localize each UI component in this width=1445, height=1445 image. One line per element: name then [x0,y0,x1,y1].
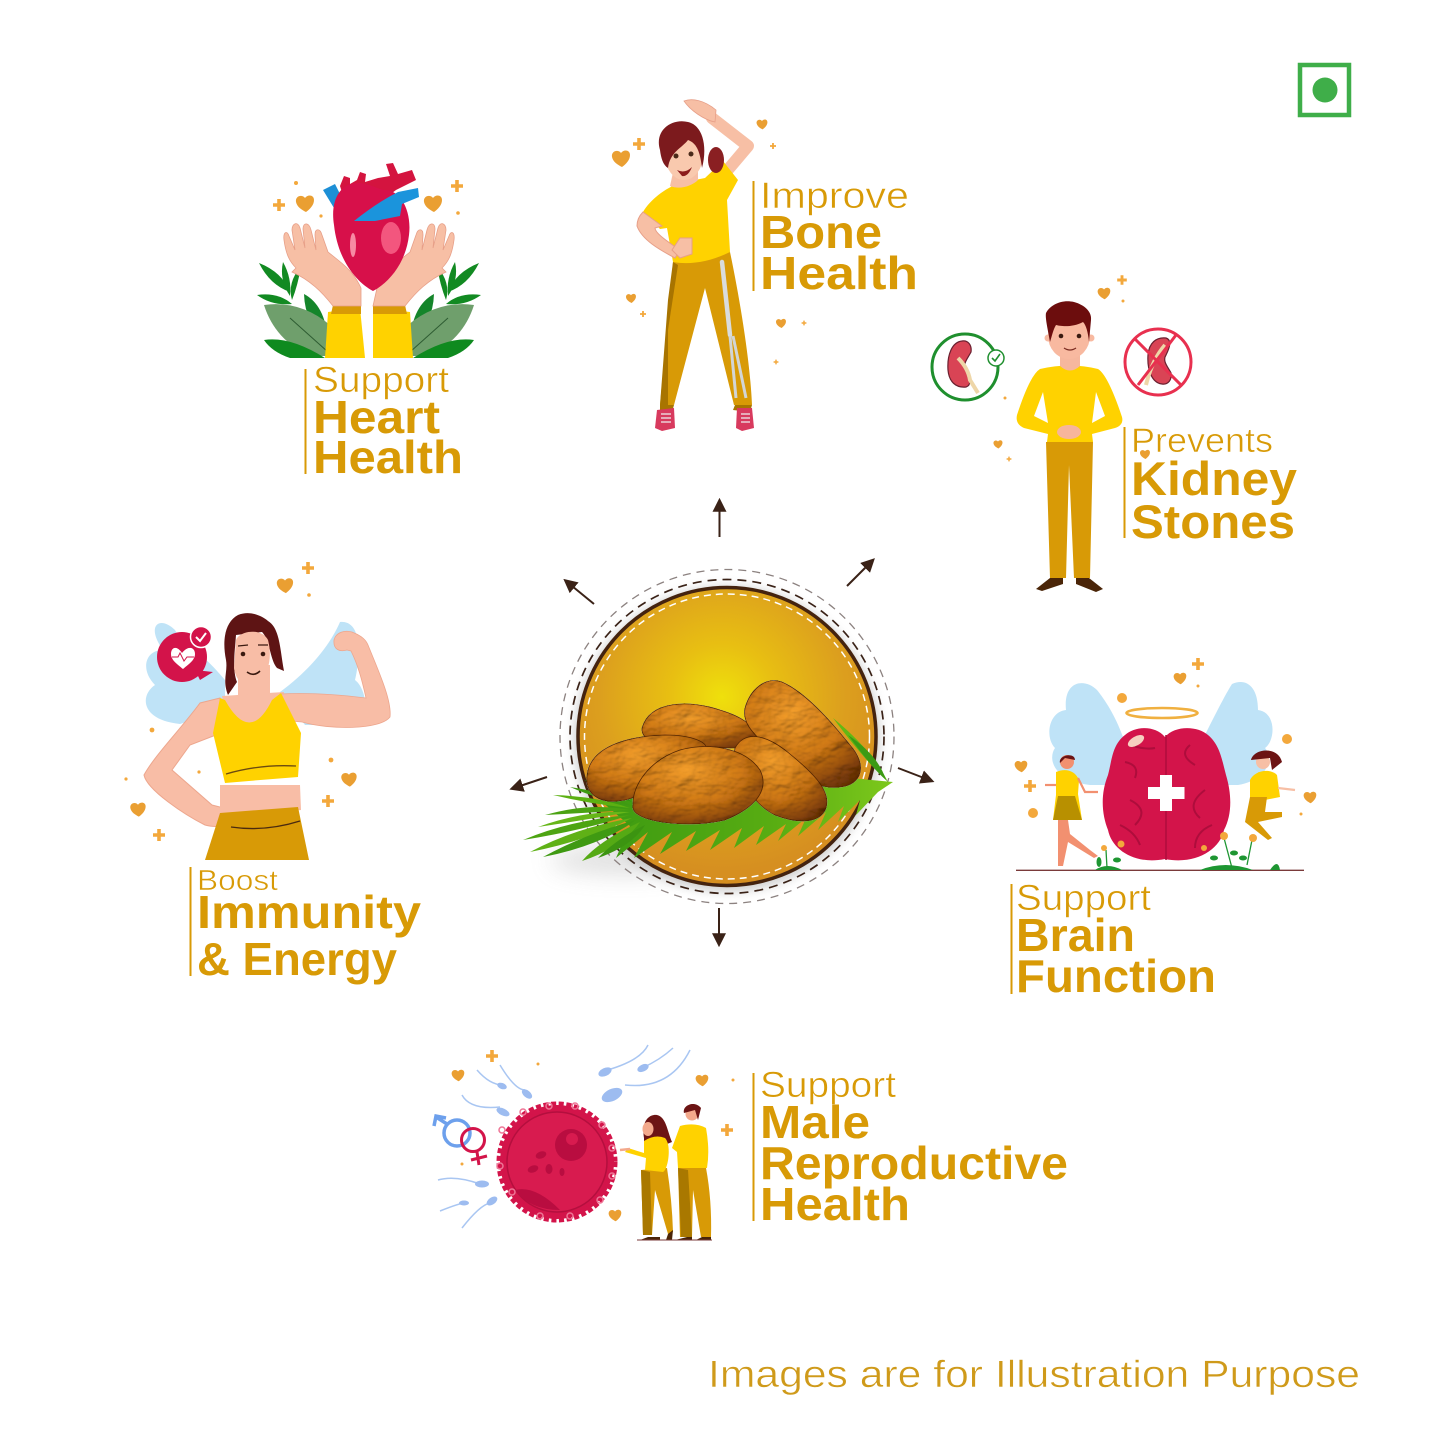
heading: support male reproductive health: Male [760,1096,870,1148]
heading: prevents kidney stones: Kidney [1131,452,1297,505]
heading: support male reproductive health [752,1064,1068,1230]
arrow: up [718,509,720,537]
panel: prevents kidney stones [932,275,1297,592]
heading: support male reproductive health: Reproductive [760,1137,1068,1189]
palm frond [523,718,893,861]
arrow: up left [572,586,594,604]
heading: improve bone health: Bone [760,206,882,258]
heading: support brain function [1010,877,1216,1002]
dates [587,681,861,824]
icon: vegetarian mark [1300,65,1349,115]
heading: support brain function: Function [1016,950,1216,1002]
panel: support heart health [257,163,481,483]
heading: support brain function: Support [1016,877,1151,918]
illustration: egg, sperm and couple [434,1045,734,1240]
heading: support heart health: Support [313,359,449,400]
heading: support brain function: Brain [1016,909,1135,961]
heading: prevents kidney stones: Prevents [1131,422,1273,460]
heading: improve bone health: Health [760,247,918,299]
heading: boost immunity and energy: & Energy [197,933,397,985]
heading: improve bone health: Improve [760,175,909,216]
heading: support male reproductive health: Support [760,1064,896,1105]
panel: support male reproductive health [434,1045,1068,1240]
panel: support brain function [1010,658,1316,1002]
heading: improve bone health [752,175,918,299]
panel: improve bone health [612,100,918,431]
arrow: down [718,908,720,936]
panel: central dates disc [523,570,894,904]
icon: heart held in hands [257,163,481,358]
heading: support heart health: Heart [313,391,440,443]
heading: prevents kidney stones [1124,422,1297,548]
heading: boost immunity and energy: Immunity [197,886,421,938]
illustration: brain with wings [1015,658,1316,870]
arrow: up right [847,566,867,586]
arrow: left [520,777,547,786]
footer disclaimer: Images are for Illustration Purpose [708,1354,1360,1396]
heading: prevents kidney stones: Stones [1131,495,1295,548]
heading: boost immunity and energy [190,865,421,985]
heading: boost immunity and energy: Boost [197,865,278,897]
illustration: flexing woman [124,562,390,860]
panel: boost immunity and energy [124,562,421,985]
arrow: right [898,768,924,778]
heading: support heart health: Health [313,431,463,483]
heading: support male reproductive health: Health [760,1178,910,1230]
heading: support heart health [304,359,463,483]
illustration: stretching woman [612,100,806,431]
illustration: man with kidneys [932,275,1191,592]
